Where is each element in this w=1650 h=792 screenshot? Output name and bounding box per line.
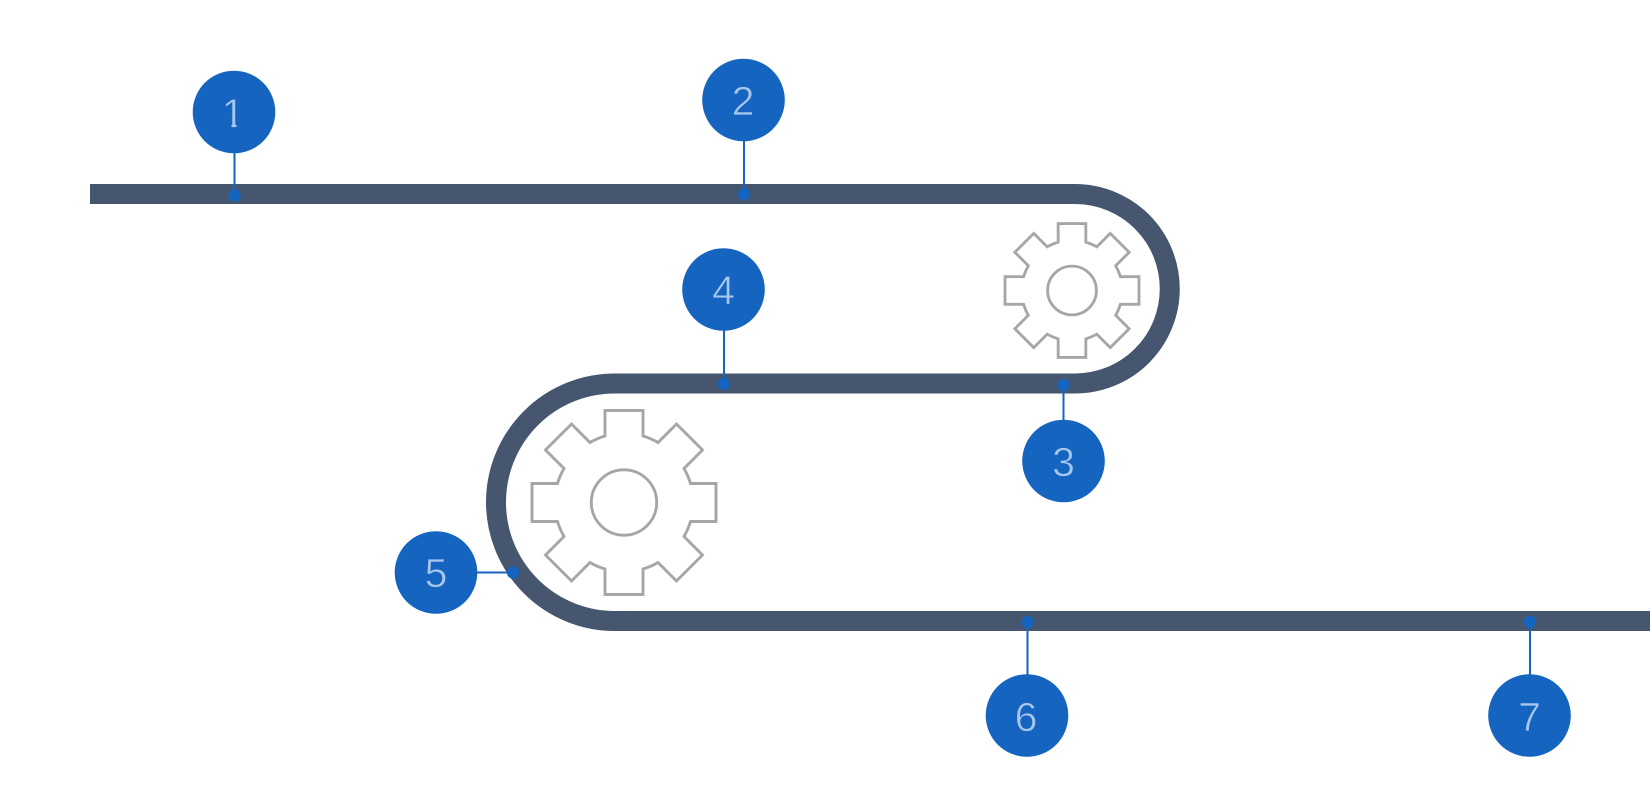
marker 1: [193, 71, 275, 202]
marker 2: [702, 59, 785, 200]
marker 7: [1488, 616, 1571, 757]
marker 7: 7: [1518, 694, 1541, 740]
marker 3: [1022, 379, 1105, 502]
marker 4: [682, 248, 765, 390]
winding road path: [90, 194, 1650, 621]
marker 6: 6: [1015, 694, 1037, 740]
marker 3: 3: [1052, 439, 1075, 485]
marker 2: 2: [732, 78, 754, 124]
marker 4: 4: [712, 268, 735, 314]
icon: large gear: [532, 410, 716, 594]
marker 1: 1: [222, 90, 244, 136]
marker 5: 5: [425, 550, 447, 596]
marker 5: [395, 531, 519, 614]
marker 6: [986, 616, 1068, 757]
icon: small gear: [1005, 224, 1139, 357]
